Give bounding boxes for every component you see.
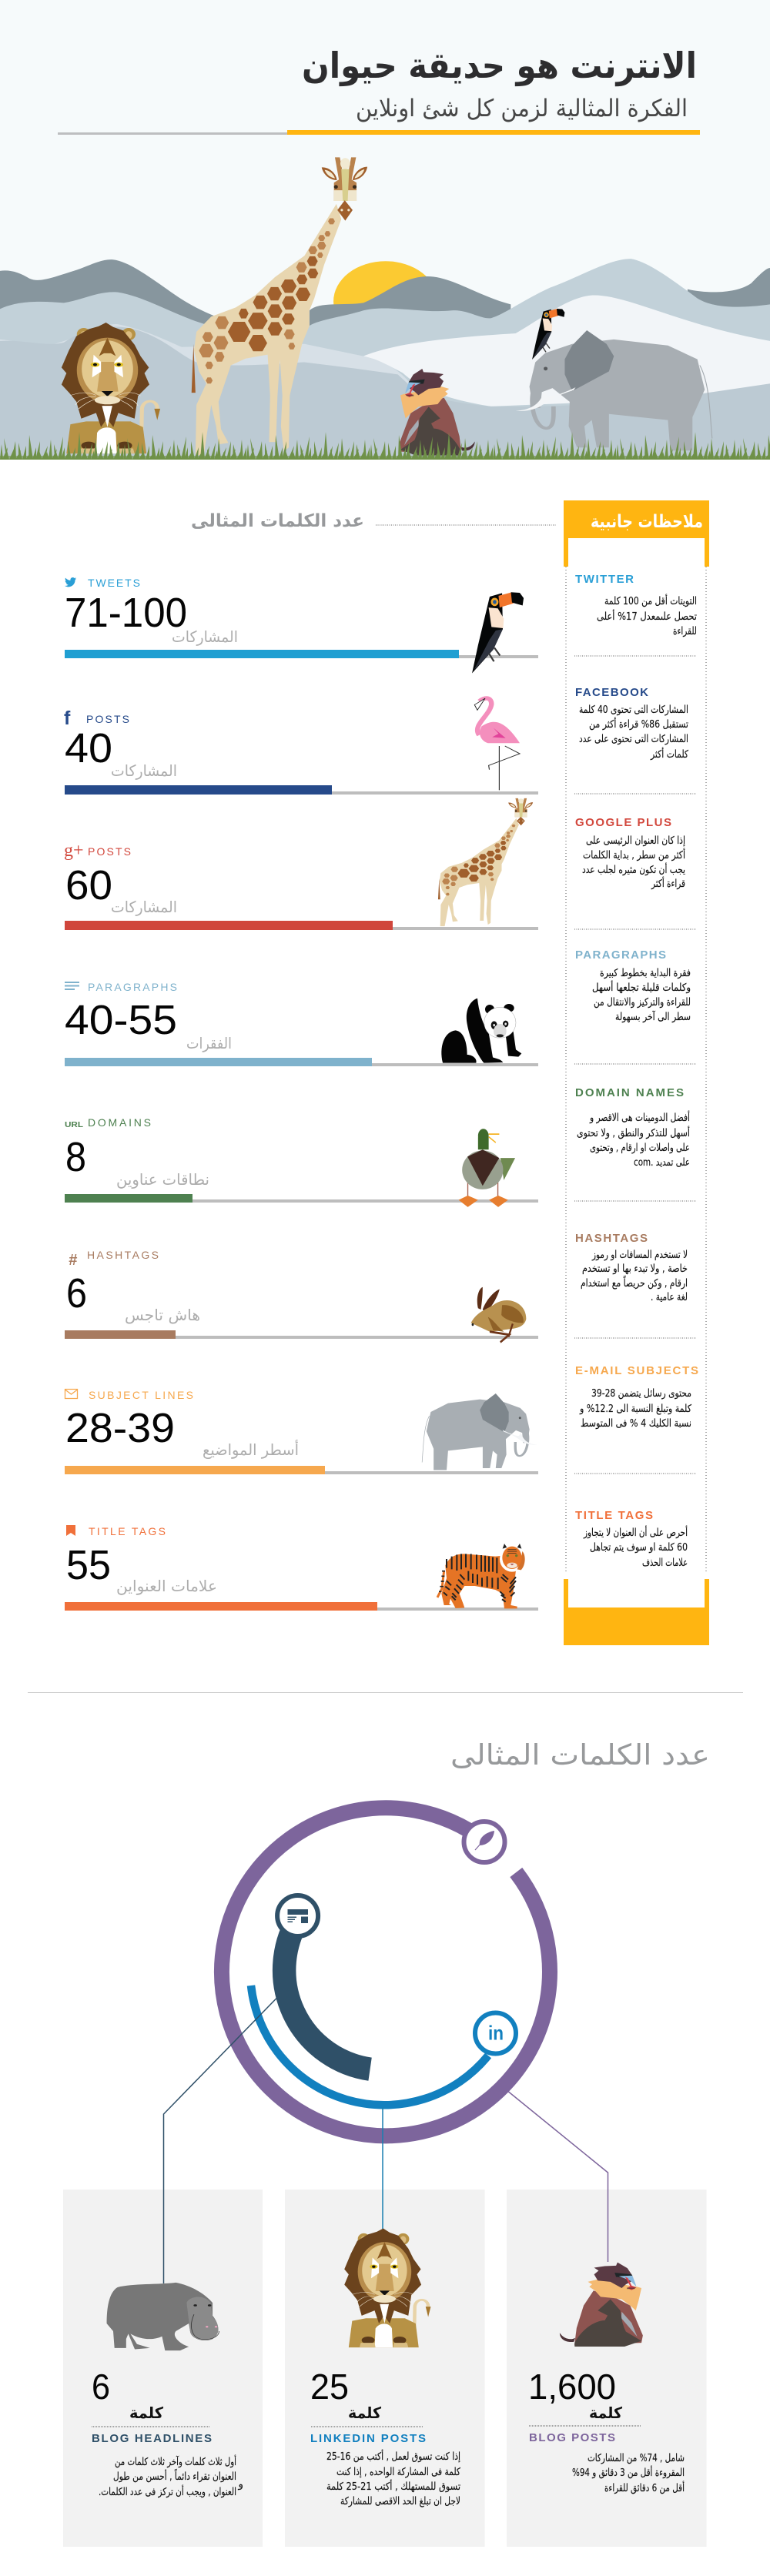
note: domain names: [575, 1086, 690, 1169]
caption: علامات العنواين: [116, 1577, 217, 1595]
note: paragraphs: سطر الى آخر بسهولة: [615, 1010, 691, 1023]
animal: giraffe: [438, 798, 533, 926]
note: facebook: تستقبل 86% قراءة أكثر من: [589, 717, 688, 731]
icon: hash: #: [69, 1252, 78, 1269]
bar: [65, 650, 538, 658]
icon: linkedin: [475, 2012, 516, 2054]
note: title tags: 60 كلمة او سوف يتم تجاهل: [590, 1541, 688, 1554]
body: لاجل ان تبلغ الحد الاقصى للمشاركة: [340, 2495, 460, 2507]
note: hashtags: HASHTAGS: [575, 1232, 648, 1245]
connector end: [382, 2190, 383, 2229]
unit: كلمة: [129, 2404, 163, 2422]
label: SUBJECT LINES: [89, 1389, 193, 1401]
caption: المشاركات: [172, 627, 238, 646]
note: paragraphs: فقرة البداية بخطوط كبيرة: [600, 967, 691, 979]
label: BLOG POSTS: [529, 2431, 615, 2444]
animal: elephant: [516, 330, 712, 450]
panel: header hero scene: [0, 0, 770, 460]
subtitle: الفكرة المثالية لزمن كل شئ اونلاين: [356, 95, 688, 122]
ring: linkedin posts: [251, 1986, 488, 2105]
body: العنوان , ويجب أن تركز فى عدد الكلمات.: [99, 2484, 236, 2498]
bar: [65, 1330, 538, 1339]
icon: facebook: f: [64, 708, 71, 729]
animal: tiger: [437, 1544, 525, 1608]
value: 40-55: [65, 997, 177, 1043]
sidebar heading: ملاحظات جانبية: [591, 512, 703, 532]
unit: كلمة: [348, 2404, 381, 2422]
value: 40: [65, 725, 112, 771]
caption: المشاركات: [111, 898, 177, 916]
animal: lion: [344, 2228, 430, 2347]
note: email subjects: كلمة وتبلغ النسبة الى 12.2% و: [579, 1403, 691, 1415]
body: إذا كنت تسوق لعمل , أكتب من 16-25: [326, 2449, 460, 2463]
bar: [65, 785, 538, 795]
note: domain names: على تمديد .com: [634, 1156, 690, 1169]
header rule: [58, 130, 700, 135]
animal: mandrill: [560, 2263, 643, 2347]
row: facebook posts: [64, 698, 538, 795]
icon: url: URL: [65, 1120, 84, 1129]
value: 25: [310, 2367, 349, 2407]
animal: flamingo: [474, 698, 520, 790]
connector: blog headlines: [163, 1998, 277, 2283]
label: POSTS: [88, 845, 131, 858]
body: كلمة فى المشاركة الواحده , إذا كنت: [336, 2466, 460, 2478]
row: google plus posts: [64, 798, 538, 930]
row: domains: [65, 1116, 538, 1207]
note: facebook: كلمات أكثر: [650, 747, 688, 761]
note: title tags: [575, 1509, 688, 1569]
caption: هاش تاجس: [125, 1306, 200, 1324]
note: google plus: قراءة أكثر: [651, 876, 685, 890]
note: title tags: أحرص على أن العنوان لا يتجاوز: [583, 1525, 688, 1539]
grass: [0, 432, 770, 460]
animal: hare: [471, 1287, 526, 1342]
value: 71-100: [65, 590, 187, 636]
note: facebook: [575, 686, 688, 761]
body: أقل من 6 دقائق للقراءة: [604, 2481, 685, 2494]
body: العنوان تقراء دائماً , أحسن من طول: [113, 2468, 236, 2483]
row: tweets: [65, 577, 538, 673]
note: hashtags: لا تستخدم المسافات او رموز: [591, 1249, 688, 1261]
note: title tags: علامات الحذف: [642, 1557, 688, 1569]
note: google plus: يجب أن تكون مثيره لجلب عدد: [582, 862, 685, 876]
body: المقروءة أقل من 3 دقائق و 94%: [572, 2465, 685, 2479]
note: hashtags: خاصة , ولا تبدء بها او تستخدم: [582, 1263, 688, 1275]
note: google plus: [575, 816, 685, 890]
panel: blog headlines: [63, 2190, 263, 2547]
note: google plus: إذا كان العنوان الرئيسى على: [586, 835, 685, 847]
icon: lines: [65, 982, 79, 990]
note: domain names: DOMAIN NAMES: [575, 1086, 684, 1099]
icon: twitter: [65, 577, 76, 587]
body: [99, 2454, 243, 2498]
sidebar bottom frame: [564, 1579, 709, 1645]
title: الانترنت هو حديقة حيوان: [302, 45, 697, 86]
connector: linkedin posts: [382, 2107, 383, 2229]
note: hashtags: ارقام , وكن حريصاً مع استخدام: [581, 1275, 688, 1290]
note: twitter: تحصل علىمعدل 17% أعلى: [597, 609, 697, 623]
note: google plus: أكثر من سطر , بداية الكلمات: [583, 848, 685, 861]
caption: الفقرات: [186, 1034, 232, 1052]
body: [572, 2452, 685, 2494]
value: 6: [92, 2367, 110, 2407]
note: domain names: أفضل الدومينات هى الاقصر و: [589, 1110, 690, 1124]
note: title tags: TITLE TAGS: [575, 1509, 653, 1522]
label: DOMAINS: [88, 1116, 151, 1129]
note: facebook: المشاركات التى تحتوى 40 كلمة: [579, 704, 688, 716]
icon: layout: [277, 1895, 318, 1936]
icon: envelope: [65, 1389, 77, 1398]
note: paragraphs: للقراءة والتركيز والانتقال من: [594, 996, 691, 1009]
panel: side notes: [564, 500, 709, 1645]
icon: google plus: g+: [64, 841, 84, 861]
body: شامل , 74% من المشاركات: [588, 2452, 685, 2464]
note: paragraphs: وكلمات قليلة تجلعها أسهل: [592, 980, 691, 994]
body: [326, 2449, 460, 2507]
label: POSTS: [86, 713, 129, 725]
label: TWEETS: [88, 577, 140, 589]
note: domain names: أسهل للتذكر والنطق , ولا تحتوى: [577, 1126, 690, 1139]
animal: duck: [459, 1129, 515, 1207]
chart: concentric word-count rings: [163, 1808, 608, 2283]
connector end: [607, 2190, 608, 2262]
panel: blog posts: [507, 2190, 707, 2547]
animal: elephant: [422, 1393, 537, 1470]
value: 28-39: [65, 1405, 175, 1451]
heading: ideal word count, section two: عدد الكلمات المثالى: [450, 1738, 710, 1771]
landscape: sun and mountains: [0, 259, 770, 460]
note: twitter: TWITTER: [575, 573, 634, 586]
panel: linkedin posts: [285, 2190, 485, 2547]
note: email subjects: [575, 1364, 698, 1430]
note: hashtags: [575, 1232, 688, 1303]
row: paragraphs: [65, 981, 538, 1066]
note: email subjects: E-MAIL SUBJECTS: [575, 1364, 698, 1377]
label: LINKEDIN POSTS: [310, 2432, 426, 2445]
note: paragraphs: [575, 948, 691, 1023]
value: 55: [66, 1542, 111, 1588]
animal: giraffe: [192, 157, 367, 455]
label: PARAGRAPHS: [88, 981, 177, 993]
note: twitter: التويتات أقل من 100 كلمة: [604, 594, 697, 607]
animal: toucan: [472, 592, 524, 673]
value: 60: [65, 862, 112, 908]
animal: toucan on elephant: [532, 309, 564, 360]
note: email subjects: محتوى رسائل يتضمن 28‏-‏39: [591, 1387, 691, 1400]
sidebar top frame: [564, 500, 709, 567]
note: twitter: للقراءة: [673, 625, 697, 637]
body: تسوق للمستهلك , أكتب 21-25 كلمة: [326, 2479, 460, 2493]
label: TITLE TAGS: [89, 1525, 166, 1537]
row: subject lines: [65, 1389, 538, 1474]
note: facebook: المشاركات التى تحتوى على عدد: [579, 733, 688, 745]
body: أول ثلاث كلمات وآخر ثلاث كلمات من: [115, 2454, 236, 2468]
note: domain names: على واصلات او ارقام , وتحتوى: [590, 1142, 690, 1154]
bar: [65, 1194, 538, 1203]
icon: bookmark: [66, 1525, 75, 1536]
body: و: [237, 2478, 243, 2491]
value: 1,600: [528, 2367, 616, 2407]
bar: [65, 1466, 538, 1474]
label: BLOG HEADLINES: [92, 2432, 212, 2445]
connector: blog posts: [507, 2090, 608, 2262]
value: 6: [66, 1270, 87, 1316]
animal: hippo: [107, 2283, 219, 2350]
note: twitter: [575, 573, 697, 637]
bar: [65, 1058, 538, 1066]
caption: أسطر المواضيع: [203, 1440, 299, 1459]
unit: كلمة: [589, 2404, 622, 2422]
caption: نطاقات عناوين: [116, 1170, 209, 1189]
heading: ideal word count: عدد الكلمات المثالى: [191, 511, 364, 531]
value: 8: [65, 1134, 86, 1180]
note: hashtags: لغة عامية .: [651, 1291, 688, 1303]
connector end: [163, 2190, 165, 2283]
animal: panda: [441, 999, 521, 1063]
ring: blog headlines: [284, 1917, 370, 2069]
bar: [65, 921, 538, 930]
note: google plus: GOOGLE PLUS: [575, 816, 671, 829]
note: paragraphs: PARAGRAPHS: [575, 948, 666, 962]
caption: المشاركات: [111, 761, 177, 780]
icon: feather: [464, 1822, 505, 1862]
note: email subjects: نسبة الكليك 4 % فى المتوسط: [581, 1417, 691, 1430]
ring: blog posts: [222, 1808, 550, 2136]
animal: mandrill: [399, 369, 475, 456]
label: HASHTAGS: [87, 1249, 159, 1261]
row: title tags: [65, 1525, 538, 1611]
icon: linkedin: in: [488, 2022, 504, 2045]
bar: [65, 1602, 538, 1611]
animal: lion: [62, 323, 160, 453]
row: hashtags: [65, 1249, 538, 1342]
note: facebook: FACEBOOK: [575, 686, 648, 699]
